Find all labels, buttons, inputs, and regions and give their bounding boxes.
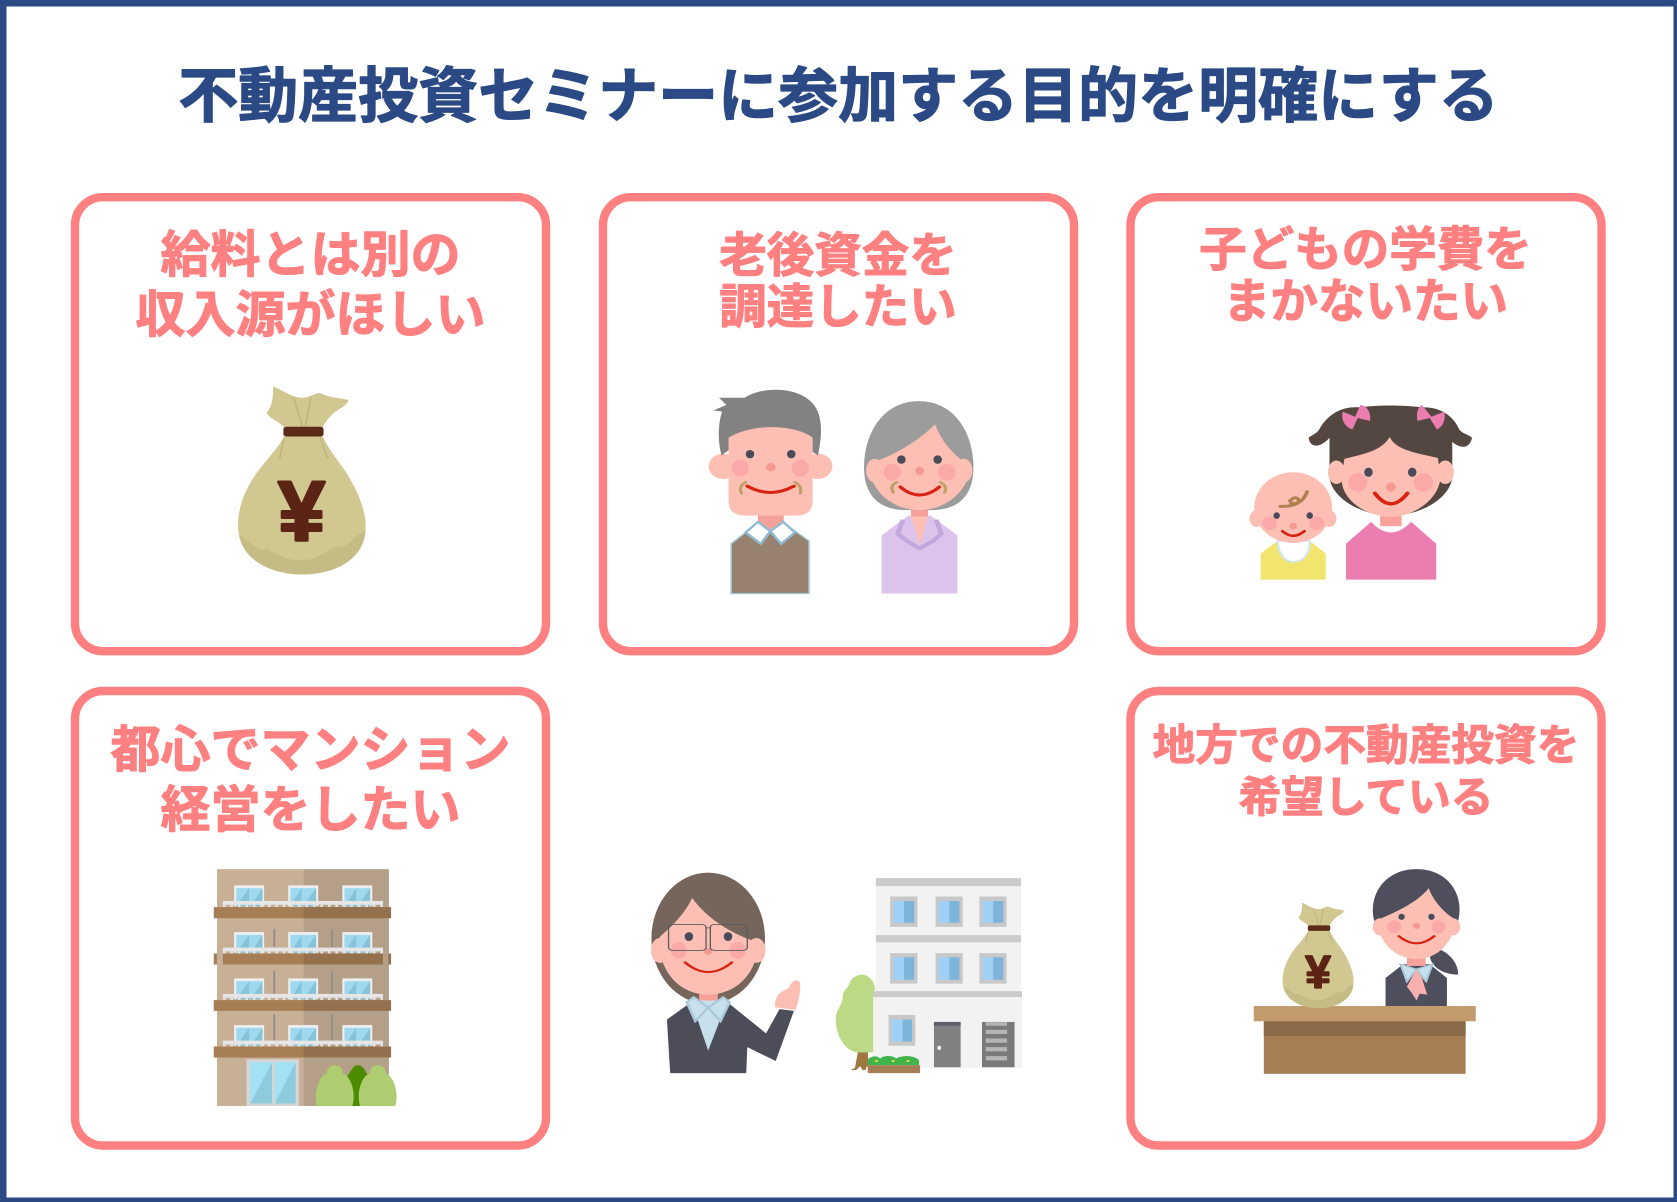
- icon: small money bag: [1283, 903, 1354, 1008]
- icon: receptionist and desk: [1254, 869, 1476, 1074]
- heading: urban apartment: 経営をしたい: [160, 782, 460, 838]
- heading: retirement funds: 調達したい: [719, 282, 957, 334]
- panel: regional real estate: [1130, 691, 1602, 1146]
- icon: money bag: [238, 386, 366, 575]
- heading: extra income: 収入源がほしい: [136, 287, 486, 343]
- panel: urban apartment: [75, 691, 546, 1146]
- heading: education costs: 子どもの学費を: [1199, 224, 1532, 277]
- heading: extra income: 給料とは別の: [160, 227, 460, 283]
- heading: regional real estate: 地方での不動産投資を: [1153, 722, 1579, 770]
- icon: white apartment building: [836, 878, 1022, 1073]
- heading: retirement funds: 老後資金を: [719, 230, 957, 283]
- heading: regional real estate: 希望している: [1239, 774, 1493, 822]
- icon: girl: [1309, 405, 1472, 580]
- heading: education costs: まかないたい: [1223, 276, 1508, 329]
- panel: education costs: [1130, 197, 1602, 651]
- icon: baby: [1249, 472, 1336, 580]
- panel: retirement funds: [603, 197, 1074, 651]
- icon: small money bag: ¥: [1305, 946, 1331, 998]
- icon: money bag: ¥: [278, 464, 325, 558]
- heading: urban apartment: 都心でマンション: [110, 722, 510, 778]
- panel: extra income: [75, 197, 546, 651]
- icon: presenter with glasses: [651, 873, 800, 1073]
- icon: apartment building: [214, 869, 397, 1106]
- title: 不動産投資セミナーに参加する目的を明確にする: [178, 63, 1499, 130]
- icon: elderly woman: [864, 401, 973, 593]
- icon: elderly man: [709, 390, 832, 593]
